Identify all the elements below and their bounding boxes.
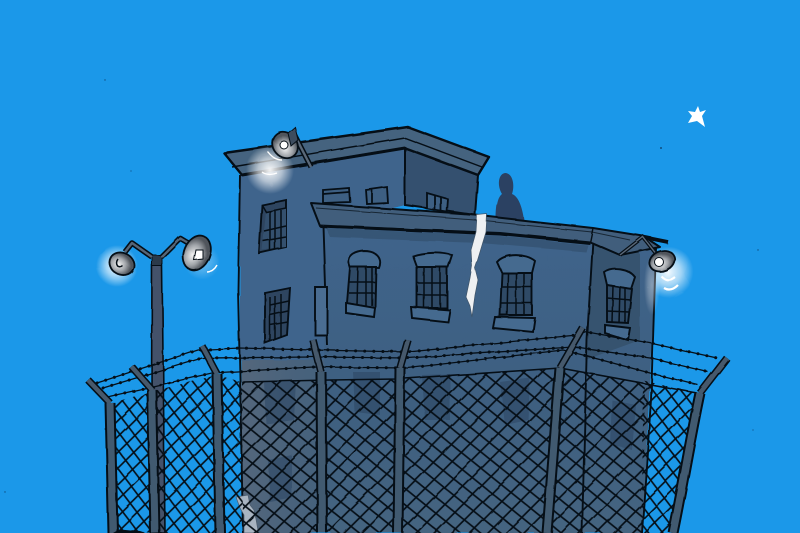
base shadow bottom left [113,529,146,533]
cornice shadow [326,228,588,252]
window A [349,251,380,268]
sky specks [4,79,759,493]
arched windows on front [346,251,635,340]
upper block side wall [405,148,478,215]
prison building [224,127,660,533]
white bedsheet rope [466,214,487,317]
left block upper wall [240,148,405,360]
glow right building lamp [642,246,694,298]
lower block front wall [322,215,657,533]
silhouette figure on roof [496,173,524,220]
window shadows on lower wall [264,372,636,502]
star [688,106,706,127]
light glow left pole [96,244,220,287]
window B [413,253,452,267]
street lamp left [105,248,139,280]
window D [604,269,635,289]
rooftop windows [323,187,448,212]
upper cornice [224,127,489,175]
roof lamp top [262,127,311,174]
prisoner figure at bottom [236,495,258,533]
street lamp right [178,231,217,275]
chain link fence [108,368,697,533]
roof lamp right [620,237,678,289]
glow on right building edge [644,255,660,315]
lower cornice [311,203,660,255]
barred windows on left block [259,200,327,343]
left block wall [240,148,405,533]
corner bay shading [585,240,640,360]
wall outlines [238,175,656,533]
light glow on building top lamp [246,146,294,194]
street light pole [125,238,190,533]
window C [497,255,535,273]
barbed wire [97,332,717,397]
fence posts [88,328,727,533]
